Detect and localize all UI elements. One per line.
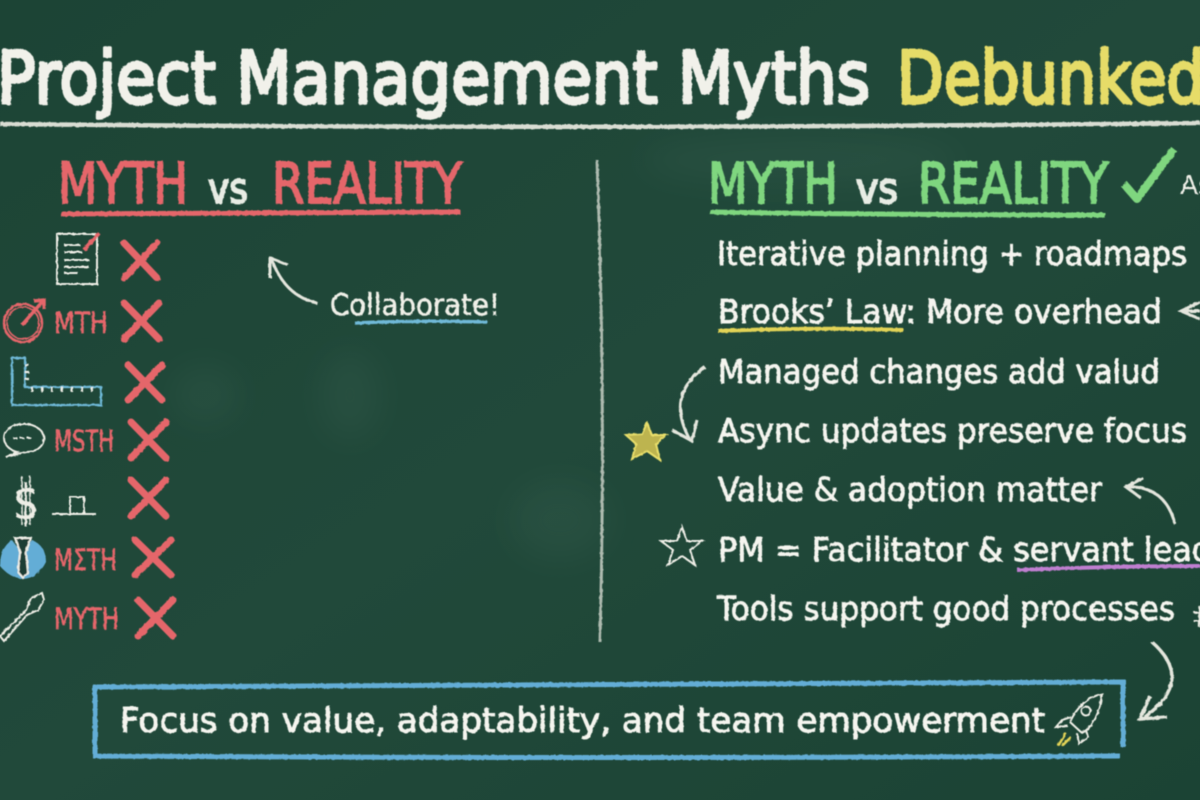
title: Project Management Myths — [0, 36, 870, 120]
arrow: to async updates — [672, 367, 705, 441]
callout: collaborate: Collaborate! — [330, 288, 500, 322]
arrow: pointing to overhead — [1181, 302, 1200, 319]
icon: check mark — [1124, 149, 1174, 199]
arrow: to bottom banner — [1140, 642, 1172, 719]
myth label row 4: MSTH — [54, 424, 114, 458]
icon: shirt and tie — [0, 538, 46, 579]
icon: outline star — [661, 527, 702, 565]
reality panel heading: MYTH — [708, 152, 838, 217]
panel: myths — [0, 152, 500, 641]
reality list: Async updates preserve focus — [718, 411, 1187, 450]
icon: ruler — [12, 358, 101, 405]
icon: rocket — [1056, 694, 1102, 746]
icon: step chart — [52, 497, 96, 514]
myth label row 2: MTH — [54, 306, 108, 340]
myth label row 7: MYTH — [54, 602, 119, 636]
icon: speech bubble — [4, 424, 44, 457]
icon: dollar: $ — [13, 475, 39, 531]
icon: yellow star — [626, 423, 666, 460]
myth heading underline — [61, 212, 460, 214]
title underline — [0, 123, 1200, 127]
highlight: servant leader underline — [1017, 566, 1200, 570]
reality list: Tools support good processes — [716, 589, 1175, 628]
banner frame — [93, 682, 1123, 758]
reality panel heading — [708, 152, 1109, 217]
icon: target — [4, 300, 44, 342]
reality panel heading: vs — [856, 164, 898, 213]
reality list: Managed changes add valud — [718, 352, 1160, 391]
myth panel heading: MYTH — [58, 152, 188, 217]
reality list: Brooks’ Law: More overhead — [718, 292, 1162, 331]
reality panel heading: REALITY — [918, 152, 1109, 217]
icon: document and pencil — [57, 233, 99, 284]
myth label row 6: MΣTH — [54, 543, 117, 577]
myth panel heading: vs — [208, 164, 248, 213]
arrow: to value and adoption — [1126, 478, 1175, 524]
panel: takeaway banner — [93, 682, 1123, 758]
divider — [597, 160, 602, 642]
arrow: to myth heading — [270, 258, 317, 303]
panel: realities — [626, 149, 1200, 719]
myth panel heading — [58, 152, 463, 217]
banner text: Focus on value, adaptability, and team empowerment — [120, 701, 1045, 741]
icon: marker — [0, 593, 44, 641]
reality list — [716, 234, 1200, 628]
red cross marks — [124, 243, 173, 636]
highlight: Brooks' Law underline — [718, 329, 903, 331]
reality heading underline — [710, 212, 1105, 215]
reality list: Value & adoption matter — [718, 470, 1102, 509]
myth panel heading: REALITY — [272, 152, 463, 217]
